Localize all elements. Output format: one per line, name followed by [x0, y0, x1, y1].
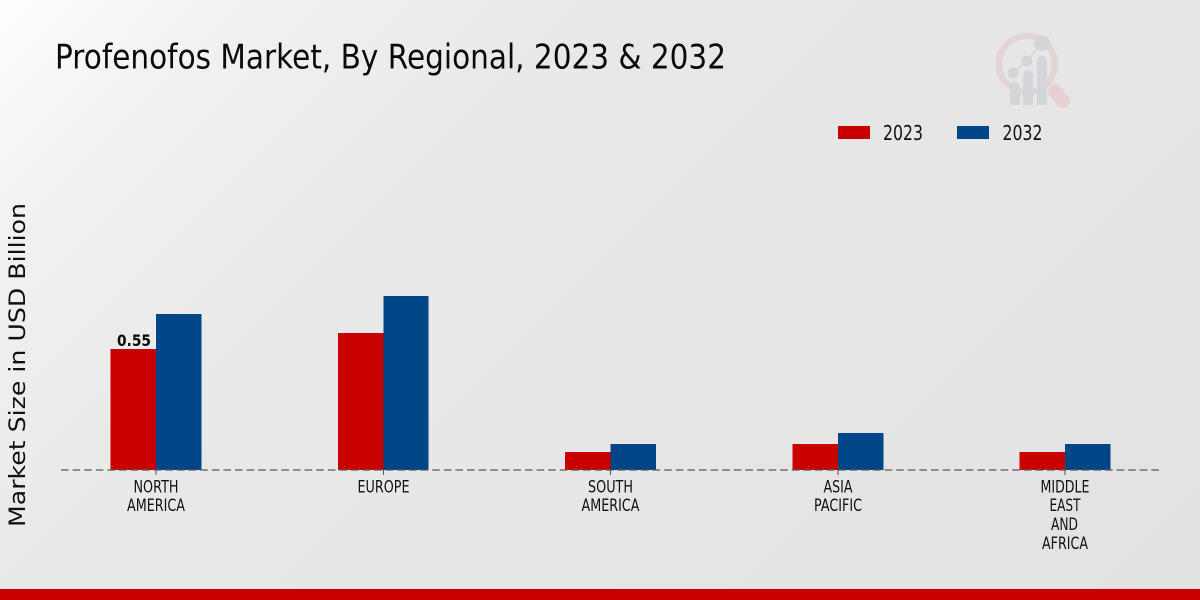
footer bar	[0, 589, 1200, 600]
group: Middle East and Africa	[1020, 444, 1110, 470]
group: North America	[110, 314, 202, 470]
group: South America	[565, 444, 656, 470]
label: Middle East and Africa: AFRICA	[1042, 534, 1089, 553]
legend: 2023: 2023	[883, 121, 923, 145]
x axis labels	[127, 478, 1090, 553]
label: North America: NORTH	[134, 478, 178, 497]
icon: magnifier logo watermark	[999, 35, 1063, 105]
title: Profenofos Market, By Regional, 2023 & 2032	[55, 38, 726, 78]
y axis label: Market Size in USD Billion	[5, 203, 31, 527]
legend	[838, 121, 1042, 145]
label: South America: SOUTH	[588, 478, 633, 497]
legend: 2032: 2032	[1002, 121, 1042, 145]
value label: 0.55	[117, 331, 151, 350]
label: South America: AMERICA	[582, 496, 640, 515]
label: Europe: EUROPE	[358, 478, 410, 497]
label: Middle East and Africa: MIDDLE	[1040, 478, 1090, 497]
x axis baseline	[61, 470, 1160, 475]
label: Middle East and Africa: AND	[1051, 515, 1078, 534]
legend: 2032	[957, 121, 1042, 145]
bar chart	[110, 296, 1110, 470]
label: Middle East and Africa: EAST	[1050, 496, 1081, 515]
label: Asia Pacific: PACIFIC	[814, 496, 862, 515]
label: North America: AMERICA	[127, 496, 186, 515]
group: Europe	[338, 296, 428, 470]
group: Asia Pacific	[792, 433, 884, 470]
legend: 2023	[838, 121, 923, 145]
label: Asia Pacific: ASIA	[824, 478, 853, 497]
